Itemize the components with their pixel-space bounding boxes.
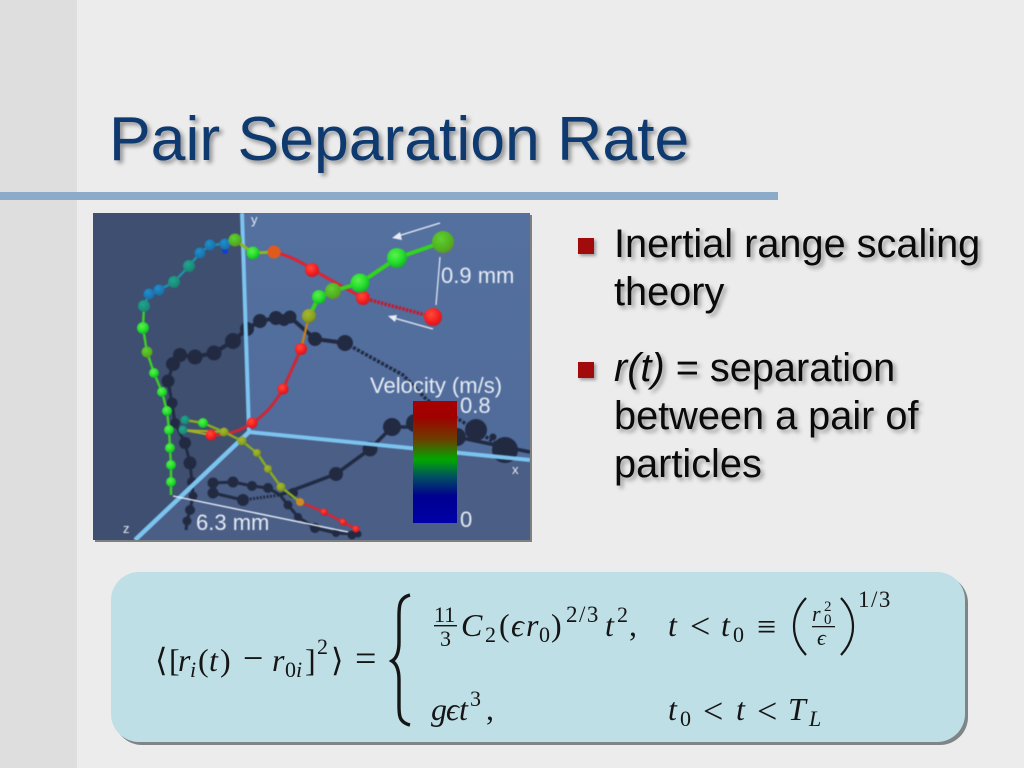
panel body [111, 572, 965, 742]
figure labels: 6.3 mm [196, 510, 269, 535]
left-hand side: ⟩ [331, 642, 343, 678]
left-hand side: i [190, 657, 196, 682]
first case: 0 [824, 612, 832, 628]
second case: g [431, 691, 447, 727]
right wall [242, 213, 530, 460]
particle trajectory two [178, 231, 454, 532]
left-hand side: ( [198, 642, 209, 678]
left-hand side: [ [169, 642, 180, 678]
figure labels: 0 [460, 507, 472, 532]
first case: < [690, 606, 710, 646]
curly brace [392, 595, 410, 725]
bullet text two: between a pair of [614, 394, 918, 438]
equation [155, 587, 892, 731]
left-hand side: ⟨ [155, 642, 167, 678]
second case: 0 [680, 706, 691, 731]
left-hand side: − [243, 638, 263, 678]
bullet text two [614, 346, 924, 490]
axes [135, 213, 530, 540]
title: Pair Separation Rate [109, 104, 689, 174]
first case: 0 [539, 622, 550, 647]
shadow trajectories [162, 310, 530, 540]
left-hand side: r [272, 642, 285, 678]
first case: , [629, 607, 637, 643]
second case: T [788, 691, 808, 727]
figure labels: 0.8 [460, 393, 491, 418]
second case: t [736, 691, 746, 727]
first case: r [526, 607, 539, 643]
bullet marker one [578, 238, 594, 254]
first case: 2/3 [566, 602, 600, 627]
colour scale bar [413, 401, 457, 523]
left-hand side: = [355, 638, 376, 680]
figure drop shadow [95, 215, 532, 542]
left-hand side [155, 634, 376, 682]
figure labels: x [512, 462, 519, 477]
figure labels [123, 212, 519, 536]
bullet text two: r(t) = separation [614, 346, 895, 390]
first case: C [461, 607, 483, 643]
second case [431, 686, 821, 731]
left-hand side: ] [305, 642, 316, 678]
second case: 3 [470, 686, 481, 711]
figure labels: Velocity (m/s) [370, 373, 502, 398]
bullet text one: theory [614, 270, 724, 314]
bullet text one [614, 222, 984, 319]
left-hand side: r [178, 642, 191, 678]
left-hand side: ) [220, 642, 231, 678]
first case: t [605, 607, 615, 643]
left wall [93, 213, 249, 540]
3D particle trajectory figure [93, 213, 532, 542]
first case: ϵ [511, 607, 525, 643]
figure labels: z [123, 521, 130, 536]
second case: t [668, 691, 678, 727]
second case: , [486, 691, 494, 727]
title rule [0, 192, 778, 200]
bullet text two: particles [614, 442, 762, 486]
first case: ( [499, 607, 510, 643]
left sidebar strip [0, 0, 77, 768]
figure labels: 0.9 mm [441, 263, 514, 288]
measurement lines and motion arrows [173, 223, 440, 532]
first case: 2 [617, 602, 628, 627]
left-hand side: t [209, 642, 219, 678]
particle trajectory one [137, 234, 442, 495]
first case: ϵ [817, 625, 827, 650]
second case: < [757, 691, 777, 731]
second case: t [459, 691, 469, 727]
first case: 1/3 [858, 587, 892, 612]
floor [135, 432, 530, 540]
first case: 2 [824, 599, 832, 615]
second case: ϵ [446, 691, 460, 727]
second case: < [703, 691, 723, 731]
first case: 11 [434, 602, 455, 627]
first case: t [721, 607, 731, 643]
first case: 2 [485, 622, 496, 647]
panel shadow [114, 575, 968, 745]
figure labels: y [251, 212, 258, 227]
bullet marker two [578, 362, 594, 378]
bullet text one: Inertial range scaling [614, 222, 980, 266]
first case: t [668, 607, 678, 643]
first case: ≡ [757, 609, 776, 646]
left-hand side: 0 [285, 657, 296, 682]
first case: 0 [733, 622, 744, 647]
left-hand side: i [296, 657, 302, 682]
second case: L [808, 706, 821, 731]
first case [434, 587, 892, 655]
first case: 3 [440, 626, 451, 651]
first case: r [812, 601, 821, 626]
left-hand side: 2 [317, 634, 328, 659]
first case: ) [551, 607, 562, 643]
